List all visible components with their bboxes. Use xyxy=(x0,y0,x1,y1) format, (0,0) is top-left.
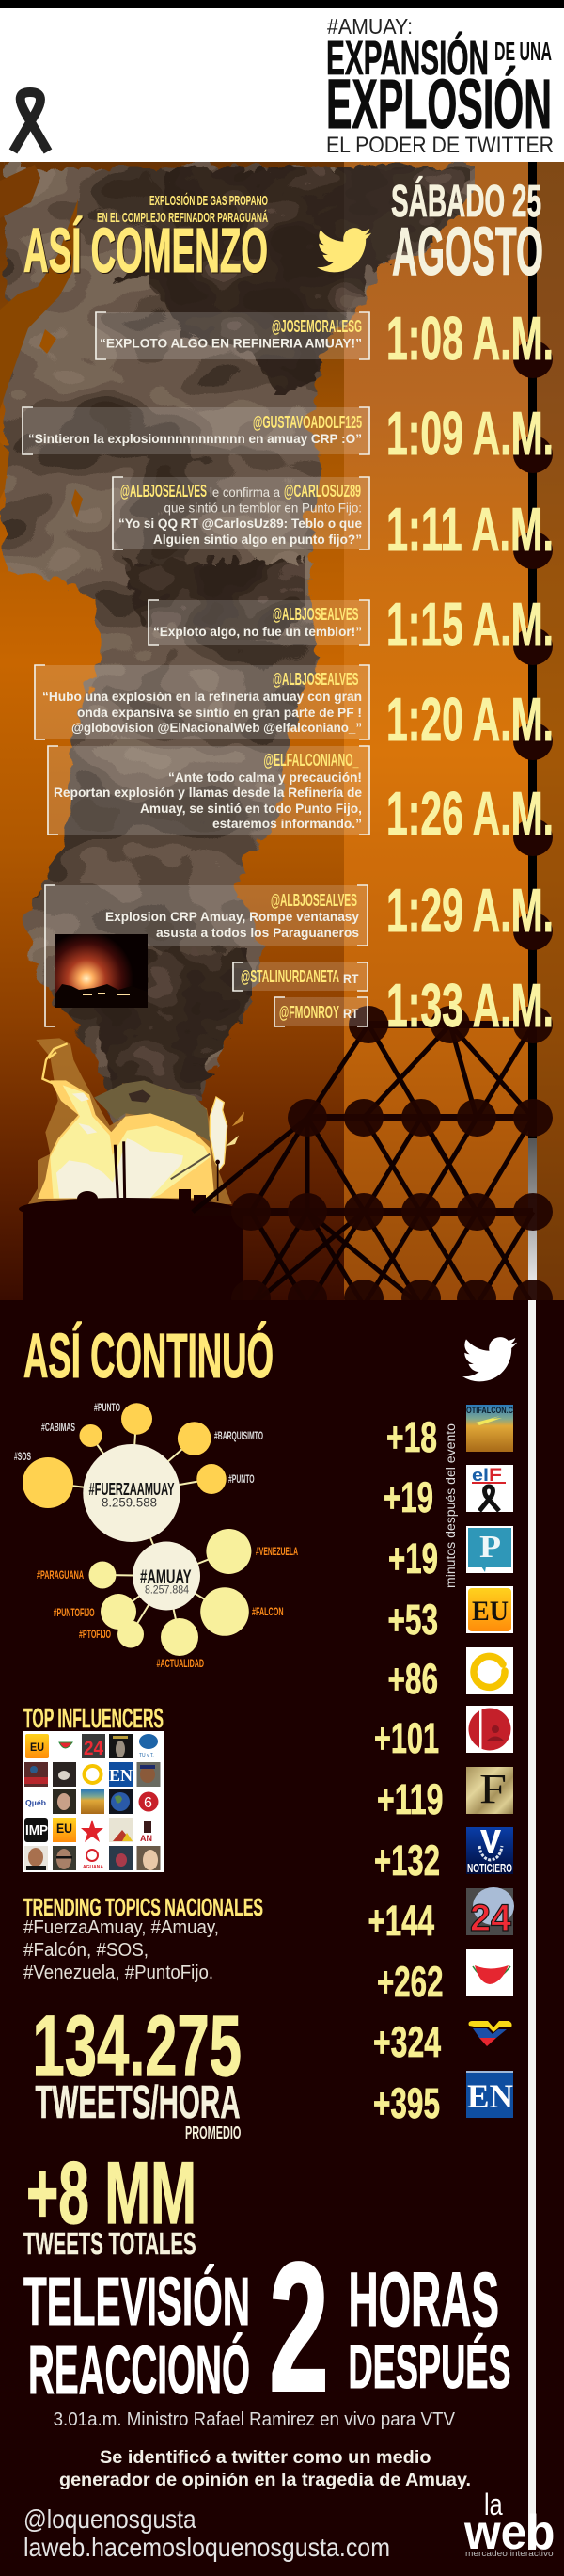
conclusion text xyxy=(59,2447,471,2490)
media delay numbers: +19 xyxy=(384,1473,433,1521)
top influencers avatar grid: 24 xyxy=(84,1738,103,1759)
axis caption: minutes after the event: minutos después del evento xyxy=(443,1423,458,1588)
media logo: el nacional: EN xyxy=(467,2077,513,2115)
footer credits: laweb.hacemosloquenosgusta.com xyxy=(24,2533,390,2562)
section heading: asi comenzo: ASÍ COMENZO xyxy=(24,215,268,286)
tweet 1:20 xyxy=(34,665,370,739)
top influencers heading: TOP INFLUENCERS xyxy=(24,1704,164,1734)
retweet 1: @STALINURDANETA xyxy=(241,966,339,986)
fire xyxy=(28,1038,244,1204)
dark ground and lower panel xyxy=(0,1300,564,2576)
footer credits xyxy=(24,2504,390,2562)
tweet 1:29 with photo: Explosion CRP Amuay, Rompe ventanasy xyxy=(105,909,359,924)
headline: tv reacted two hours later: 2 xyxy=(269,2224,329,2430)
headline: tv reacted two hours later: TELEVISIÓN xyxy=(24,2264,250,2340)
headline: tv reacted two hours later xyxy=(24,2224,511,2430)
section heading: asi continuo: ASÍ CONTINUÓ xyxy=(24,1321,274,1391)
media logo: el universal: EU xyxy=(472,1596,509,1627)
hashtag bubble chart: #VENEZUELA xyxy=(256,1546,298,1558)
media delay numbers: +53 xyxy=(387,1596,438,1644)
media logo: 24 xyxy=(466,1887,514,1939)
media logo: el falconiano: el xyxy=(472,1466,489,1485)
media delay numbers: +395 xyxy=(373,2079,440,2127)
timeline times xyxy=(386,304,554,1040)
tweet 1:20: @globovision @ElNacionalWeb @elfalconiano_” xyxy=(71,720,362,735)
smoke plume xyxy=(0,162,564,1305)
retweet 1 xyxy=(232,962,368,991)
trending topics block: #FuerzaAmuay, #Amuay, xyxy=(24,1917,219,1938)
media logo: globovision ring xyxy=(466,1647,513,1694)
hashtag bubble chart: #PTOFIJO xyxy=(79,1629,111,1641)
tweet 1:26 xyxy=(47,746,370,835)
hashtag bubble chart: #FALCON xyxy=(252,1606,284,1618)
date heading xyxy=(391,176,543,290)
tweet 1:15: @ALBJOSEALVES xyxy=(273,604,359,624)
logo: la web mercadeo interactivo: la xyxy=(484,2488,503,2521)
tweet 1:15: “Exploto algo, no fue un temblor!” xyxy=(153,624,362,639)
darker strip right of timeline xyxy=(537,162,564,1305)
hashtag bubble chart: #AMUAY xyxy=(140,1566,192,1588)
hashtag bubble chart: #SOS xyxy=(14,1451,31,1463)
top influencers avatar grid: Qµéb xyxy=(25,1799,46,1807)
tweet 1:11: Alguien sintio algo en punto fijo?” xyxy=(153,532,362,547)
media logo: noticias falcon xyxy=(466,1405,513,1452)
hashtag bubble chart xyxy=(14,1402,298,1670)
tweet 1:11: @ALBJOSEALVES xyxy=(120,481,207,501)
retweet 1: RT xyxy=(343,971,359,986)
illustration background xyxy=(0,162,564,1305)
white continuation of timeline xyxy=(528,1300,536,2550)
tweet 1:09: @GUSTAVOADOLF125 xyxy=(253,412,362,432)
retweet 2 xyxy=(274,997,368,1026)
headline: tv reacted two hours later: REACCIONÓ xyxy=(28,2332,250,2409)
hashtag bubble chart: #BARQUISIMTO xyxy=(214,1430,263,1442)
top influencers avatar grid: EU xyxy=(30,1741,44,1754)
tweet 1:29 with photo: asusta a todos los Paraguaneros xyxy=(156,925,359,940)
media delay numbers: +262 xyxy=(377,1958,444,2006)
footer credits: @loquenosgusta xyxy=(24,2504,196,2534)
tweet 1:08: @JOSEMORALESG xyxy=(272,316,362,336)
tweet 1:11: “Yo si QQ RT @CarlosUz89: Teblo o que xyxy=(118,516,362,531)
timeline line xyxy=(528,162,537,1300)
top influencers avatar grid: 6 xyxy=(144,1795,152,1811)
icon: yellow twitter bird xyxy=(317,228,371,272)
top influencers avatar grid xyxy=(23,1731,164,1872)
top influencers avatar grid: IMP xyxy=(25,1822,48,1838)
section heading: asi comenzo xyxy=(24,192,268,286)
media delay numbers: +119 xyxy=(377,1775,444,1823)
media logo: venevision noticiero: NOTICIERO xyxy=(467,1861,512,1875)
top influencers avatar grid: EU xyxy=(56,1821,72,1836)
top influencers avatar grid: AGUANA xyxy=(83,1865,103,1870)
trending topics block xyxy=(24,1893,263,1983)
media logo: el falconiano xyxy=(466,1465,513,1512)
tweet 1:08 xyxy=(95,312,370,359)
media delay numbers: +324 xyxy=(373,2018,441,2066)
media delay numbers: +86 xyxy=(387,1655,438,1703)
refinery tank silhouette xyxy=(19,1189,243,1308)
hashtag bubble chart: #PUNTO xyxy=(228,1473,255,1486)
tweet 1:15 xyxy=(148,600,370,645)
media delay numbers: +101 xyxy=(374,1714,439,1762)
top influencers avatar grid: TU y T. xyxy=(139,1753,154,1758)
media delay numbers: +144 xyxy=(368,1897,434,1945)
trending topics block: #Venezuela, #PuntoFijo. xyxy=(24,1963,213,1983)
stat: total tweets: +8 MM xyxy=(26,2143,196,2242)
logo: la web mercadeo interactivo: mercadeo interactivo xyxy=(465,2549,554,2559)
top influencers avatar grid: AN xyxy=(140,1834,152,1843)
top influencers avatar grid: EN xyxy=(109,1766,133,1785)
section heading: asi comenzo: EN EL COMPLEJO REFINADOR PARAGUANÁ xyxy=(97,210,268,226)
media logo: gold f xyxy=(466,1766,513,1814)
hashtag bubble chart: #PUNTOFIJO xyxy=(54,1607,95,1619)
conclusion text: generador de opinión en la tragedia de Amuay. xyxy=(59,2470,471,2490)
tweet 1:09 xyxy=(22,407,370,454)
hashtag bubble chart: 8.259.588 xyxy=(102,1494,157,1509)
tweet 1:26: Reportan explosión y llamas desde la Refinería de xyxy=(54,785,362,800)
tweet 1:26: “Ante todo calma y precaución! xyxy=(168,770,362,785)
media logo: cadena red circle xyxy=(466,1706,513,1753)
hashtag bubble chart: #ACTUALIDAD xyxy=(156,1658,204,1670)
hashtag bubble chart: #PARAGUANA xyxy=(37,1569,84,1582)
tweet 1:11: @CARLOSUZ89 xyxy=(284,481,361,501)
hashtag bubble chart: #FUERZAAMUAY xyxy=(88,1480,175,1499)
stat: tweets per hour xyxy=(32,1998,242,2142)
media logo: noticias falcon: OTIFALCON.C xyxy=(466,1406,513,1415)
title: #AMUAY: xyxy=(327,14,413,39)
media logo: gold f: F xyxy=(479,1766,507,1812)
media delay numbers: +132 xyxy=(374,1837,440,1884)
tweet 1:20: “Hubo una explosión en la refineria amuay con gran xyxy=(42,689,362,704)
tweet 1:08: “EXPLOTO ALGO EN REFINERIA AMUAY!” xyxy=(100,335,362,350)
network lattice tower xyxy=(193,1006,553,1317)
section heading: asi comenzo: EXPLOSIÓN DE GAS PROPANO xyxy=(149,192,268,209)
hashtag bubble chart: 8.257.884 xyxy=(145,1582,189,1596)
caption: minister on vtv: 3.01a.m. Ministro Rafael Ramirez en vivo para VTV xyxy=(54,2409,456,2430)
media delay numbers: +18 xyxy=(386,1413,437,1461)
stat: total tweets: TWEETS TOTALES xyxy=(24,2226,196,2261)
tweet 1:26: estaremos informando.” xyxy=(212,816,362,831)
title xyxy=(326,14,554,158)
media logo: venevision noticiero xyxy=(466,1827,513,1875)
timeline markers xyxy=(513,341,553,950)
media logo: watermelon xyxy=(466,1949,513,1996)
media logo: vtv xyxy=(468,2021,512,2046)
header band xyxy=(0,0,564,162)
tweet 1:11: que sintió un temblor en Punto Fijo: xyxy=(164,501,362,516)
tweet 1:20: @ALBJOSEALVES xyxy=(273,669,359,689)
icon: black mourning ribbon xyxy=(13,92,48,151)
trending topics block: #Falcón, #SOS, xyxy=(24,1940,149,1961)
icon: white twitter bird xyxy=(462,1337,517,1381)
tweet 1:29 with photo xyxy=(44,885,368,1026)
retweet 2: RT xyxy=(343,1006,359,1021)
conclusion text: Se identificó a twitter como un medio xyxy=(100,2447,431,2468)
media logo: el universal xyxy=(466,1586,513,1633)
stat: total tweets xyxy=(24,2143,196,2261)
stat: tweets per hour: TWEETS/HORA xyxy=(36,2077,241,2128)
media logo: el falconiano: F xyxy=(489,1466,502,1486)
tweet 1:11 xyxy=(112,477,370,549)
tweet 1:26: @ELFALCONIANO_ xyxy=(263,750,359,770)
media delay numbers: +19 xyxy=(388,1534,438,1582)
hashtag bubble chart: #PUNTO xyxy=(94,1402,120,1414)
hashtag bubble chart: #CABIMAS xyxy=(41,1422,75,1434)
media delay numbers xyxy=(368,1413,444,2127)
photo: night explosion xyxy=(55,934,148,1008)
media logo: panorama xyxy=(466,1526,513,1573)
media logo: 24: 24 xyxy=(470,1898,512,1939)
tweet 1:09: “Sintieron la explosionnnnnnnnnnn en amuay CRP :O” xyxy=(28,431,362,446)
tweet 1:20: onda expansiva se sintio en gran parte de PF ! xyxy=(77,705,362,720)
media logo: panorama: P xyxy=(479,1530,501,1565)
logo: la web mercadeo interactivo: web xyxy=(463,2505,555,2560)
tweet 1:11: le confirma a xyxy=(210,485,280,500)
tweet 1:29 with photo: @ALBJOSEALVES xyxy=(271,890,357,910)
trending topics block: TRENDING TOPICS NACIONALES xyxy=(24,1893,263,1921)
stat: tweets per hour: 134.275 xyxy=(32,1998,242,2094)
retweet 2: @FMONROY xyxy=(279,1002,339,1022)
stat: tweets per hour: PROMEDIO xyxy=(185,2123,241,2142)
tweet 1:26: Amuay, se sintió en todo Punto Fijo, xyxy=(140,801,362,816)
